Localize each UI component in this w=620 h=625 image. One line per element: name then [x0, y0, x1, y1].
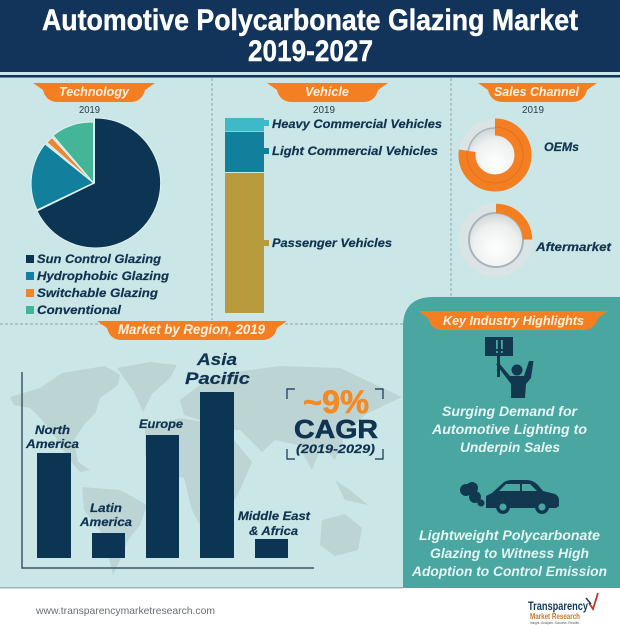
highlight text 2: Adoption to Control Emission — [411, 564, 607, 579]
ribbon: Technology — [33, 83, 155, 102]
icon: car with exhaust — [460, 480, 559, 514]
legend: Conventional — [37, 303, 122, 317]
ribbon: Technology: Technology — [59, 84, 130, 99]
highlight text 1: Underpin Sales — [460, 440, 560, 455]
bar labels: Latin — [90, 503, 122, 515]
highlight text 2: Lightweight Polycarbonate — [419, 528, 601, 543]
logo: Transparency Market Research: Market Research — [530, 612, 580, 621]
footer URL: www.transparencymarketresearch.com — [35, 605, 215, 617]
legend — [26, 252, 170, 317]
ribbon: Market by Region: Market by Region, 2019 — [118, 322, 265, 337]
CAGR callout — [287, 384, 383, 459]
panel: technology — [26, 83, 170, 317]
bar labels: America — [25, 439, 80, 451]
logo: Transparency Market Research — [528, 593, 598, 625]
highlight text 1 — [431, 404, 587, 455]
bar labels: North — [35, 425, 70, 437]
bar chart — [37, 392, 288, 558]
ribbon: Vehicle — [267, 83, 388, 102]
bar labels: Heavy Commercial Vehicles — [272, 117, 442, 131]
bar labels — [272, 117, 442, 250]
title: 2019-2027 — [248, 35, 373, 68]
logo: Transparency Market Research: Transparency — [528, 601, 588, 613]
bar labels: Light Commercial Vehicles — [272, 144, 438, 158]
header band — [0, 0, 620, 78]
legend: Sun Control Glazing — [37, 252, 162, 266]
panel: vehicle — [225, 83, 442, 313]
panel: market by region — [10, 321, 402, 575]
bar labels: & Africa — [249, 526, 299, 538]
bar labels: Asia — [196, 350, 237, 369]
bar labels — [25, 350, 311, 538]
title — [42, 4, 578, 68]
label: OEMs: OEMs — [544, 140, 579, 154]
ribbon: Vehicle: Vehicle — [305, 84, 349, 99]
year label: 2019 — [79, 105, 100, 116]
stacked bar — [225, 118, 269, 313]
year label: 2019 — [313, 105, 335, 116]
footer rule — [0, 587, 403, 588]
panel: key industry highlights — [403, 297, 620, 588]
donut: Aftermarket — [459, 203, 533, 277]
ribbon: Key Industry Highlights: Key Industry Highlights — [443, 313, 584, 328]
donut: OEMs — [459, 119, 531, 191]
ribbon: Sales Channel: Sales Channel — [494, 84, 579, 99]
CAGR callout: ~9% — [303, 384, 369, 420]
CAGR callout: (2019-2029) — [296, 442, 375, 456]
label: Aftermarket: Aftermarket — [535, 240, 612, 254]
highlight text 1: Surging Demand for — [442, 404, 578, 419]
bar labels: America — [79, 517, 133, 529]
pie chart — [31, 118, 161, 248]
year label: 2019 — [522, 105, 544, 116]
highlight text 2 — [411, 528, 607, 579]
highlight text 2: Glazing to Witness High — [430, 546, 589, 561]
CAGR callout: CAGR — [294, 414, 378, 444]
legend: Hydrophobic Glazing — [37, 269, 170, 283]
legend: Switchable Glazing — [37, 286, 159, 300]
world map — [10, 362, 402, 575]
panel: sales channel — [459, 83, 612, 277]
icon: person holding sign — [485, 337, 534, 398]
chart axes — [22, 372, 314, 568]
bar labels: Middle East — [238, 511, 311, 523]
logo: Transparency Market Research: Insight. Analysis. Success. Results — [530, 621, 579, 625]
bar labels: Pacific — [185, 369, 251, 388]
ribbon: Key Industry Highlights — [418, 311, 608, 330]
bar labels: Europe — [139, 419, 184, 431]
ribbon: Market by Region — [97, 321, 287, 340]
highlight text 1: Automotive Lighting to — [431, 422, 587, 437]
ribbon: Sales Channel — [478, 83, 597, 102]
bar labels: Passenger Vehicles — [272, 236, 392, 250]
